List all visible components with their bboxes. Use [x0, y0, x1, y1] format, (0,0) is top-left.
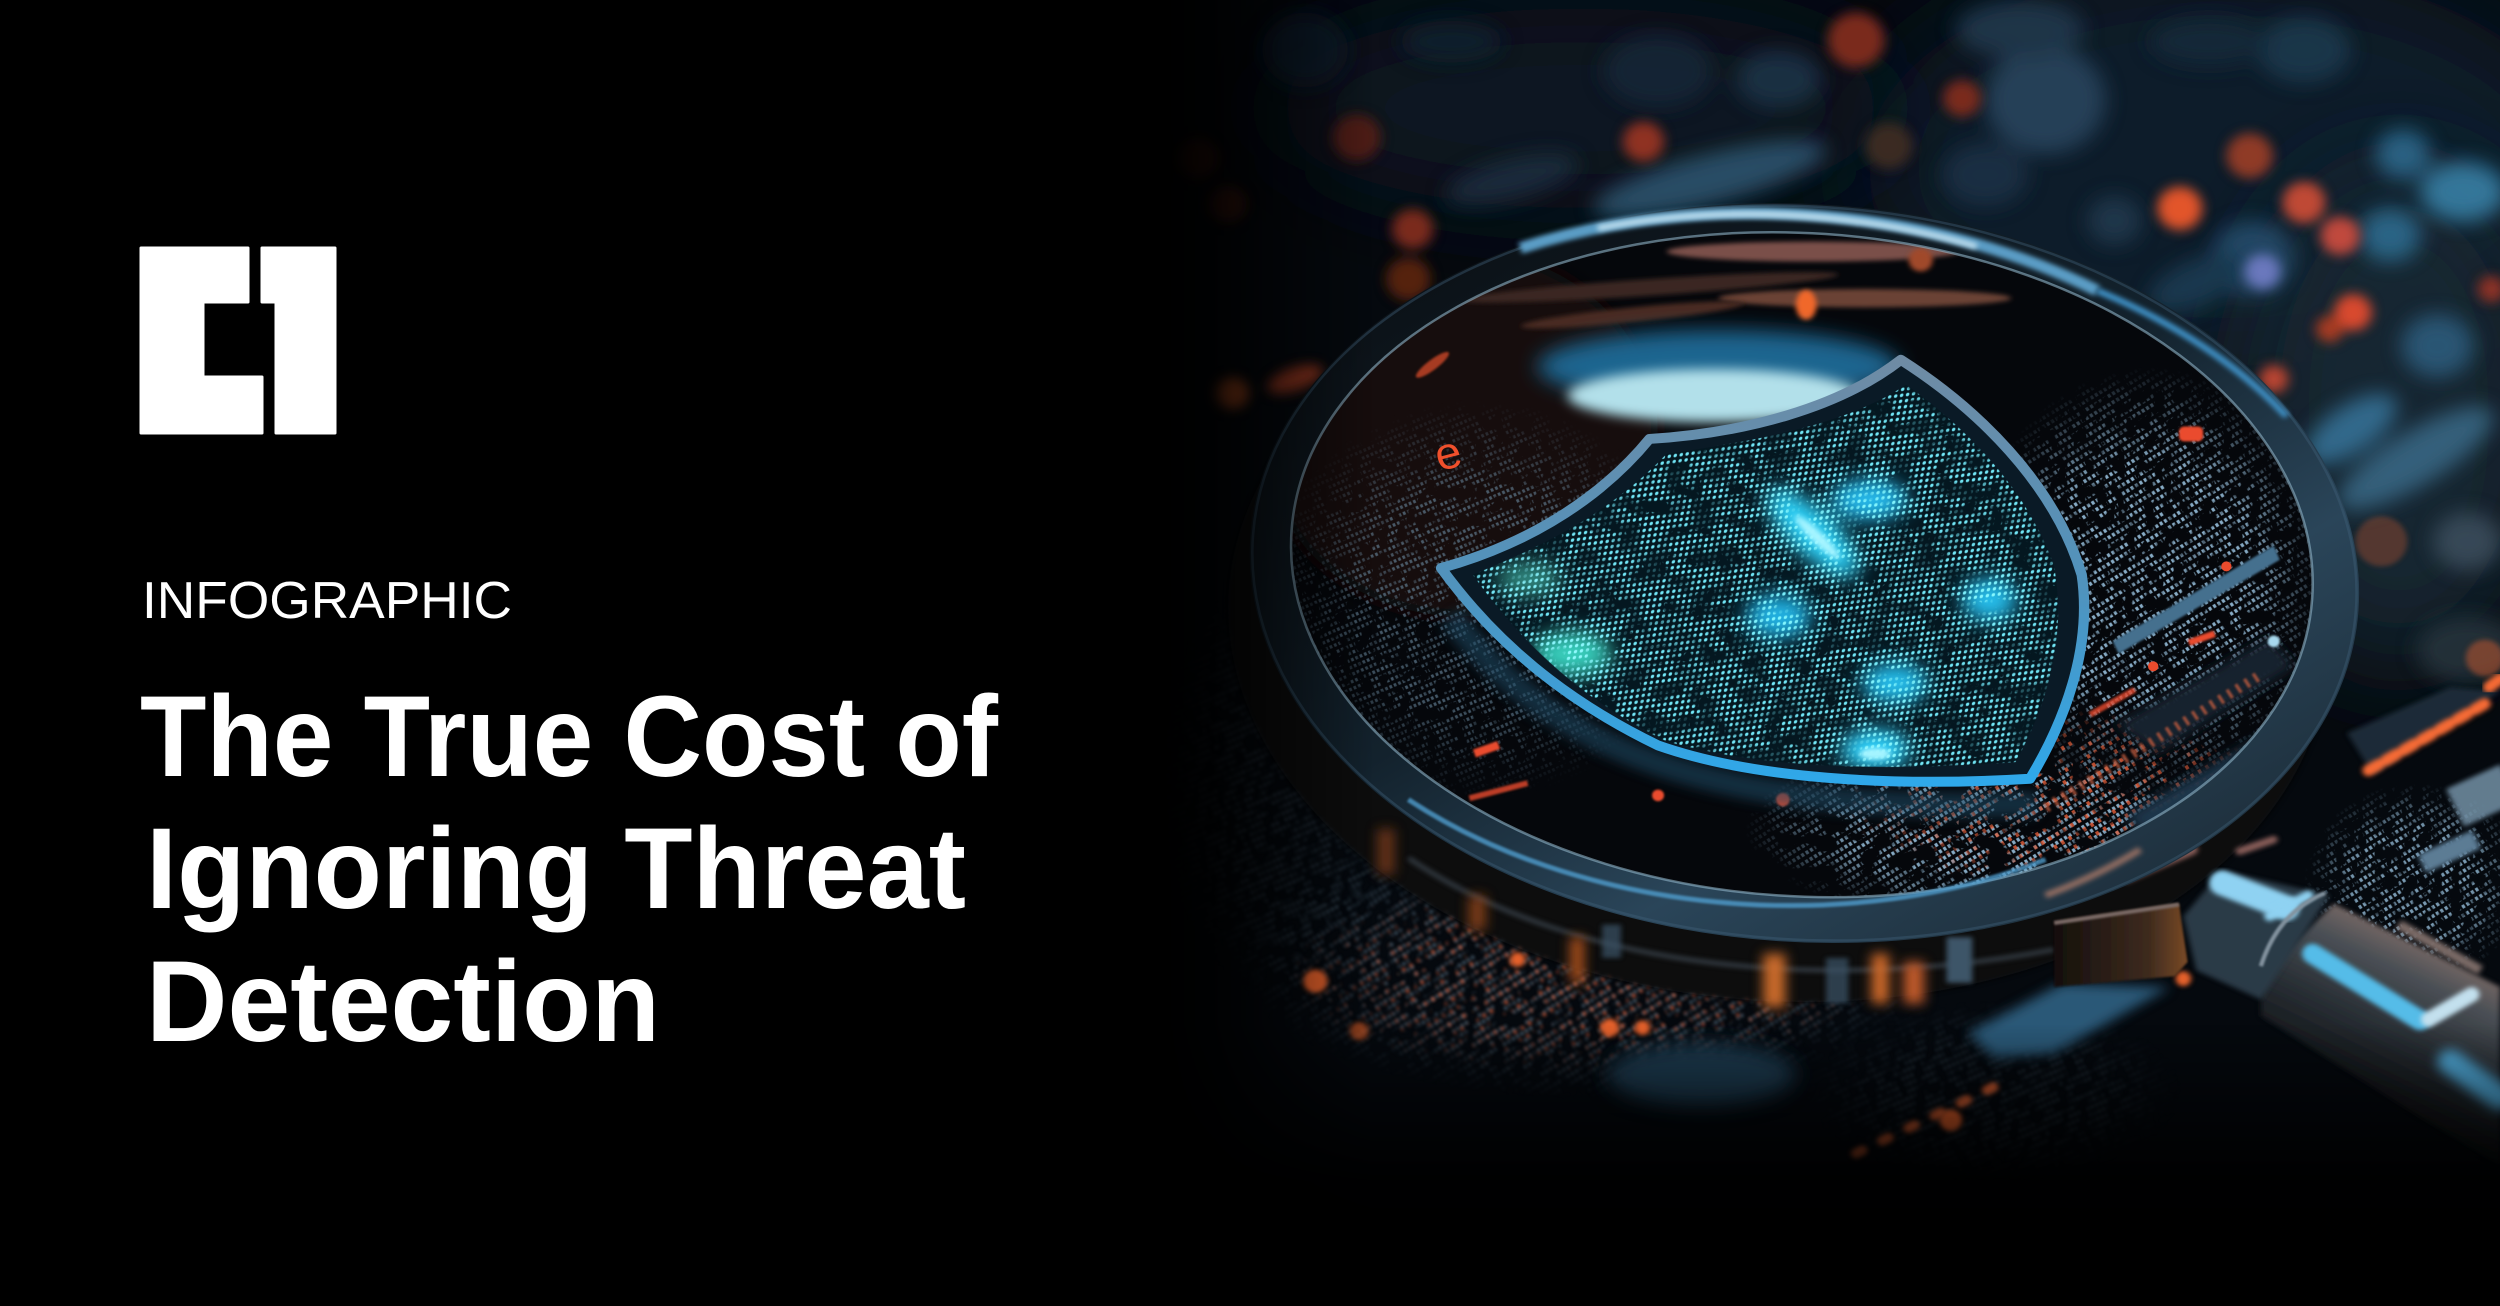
shield [1441, 360, 2084, 783]
logo [141, 248, 335, 433]
lens ring [1224, 167, 2385, 979]
circuit traces outside the lens [1254, 514, 2500, 1160]
glare behind the shield [1537, 330, 1899, 403]
circuit texture in lens [1292, 409, 1620, 791]
logo: numeral one [262, 248, 335, 433]
title [140, 673, 999, 1066]
handle neck [2054, 904, 2188, 987]
magnifier handle [2054, 840, 2500, 1166]
bokeh: blue blobs [1262, 0, 2500, 683]
logo: bracket [141, 248, 262, 433]
board backdrop [1150, 0, 2500, 1264]
title: Ignoring Threat [146, 805, 966, 933]
title: The True Cost of [140, 673, 999, 801]
shadow under the shield [1451, 616, 2037, 805]
bokeh: orange and red lights [1177, 12, 2500, 409]
glass reflections [1667, 242, 1959, 262]
lens rim underside [1202, 215, 2355, 1037]
cyan hot spots [1496, 477, 2017, 770]
shield data field [1473, 386, 2058, 768]
eyebrow label: INFOGRAPHIC [142, 572, 512, 630]
lens glass [1292, 234, 2313, 898]
ring top highlight [1520, 213, 2097, 291]
fade to black at bottom [1148, 1024, 2500, 1266]
lens inner edge [1268, 200, 2336, 930]
handle collar [2183, 870, 2330, 999]
fade to black on left [1148, 0, 1372, 1269]
hero image: magnifying glass over circuit board [1198, 0, 2500, 1160]
title: Detection [146, 938, 660, 1066]
handle body [2261, 904, 2500, 1166]
shield frame [1441, 360, 2084, 782]
glowing glyph: e [1429, 426, 1467, 481]
